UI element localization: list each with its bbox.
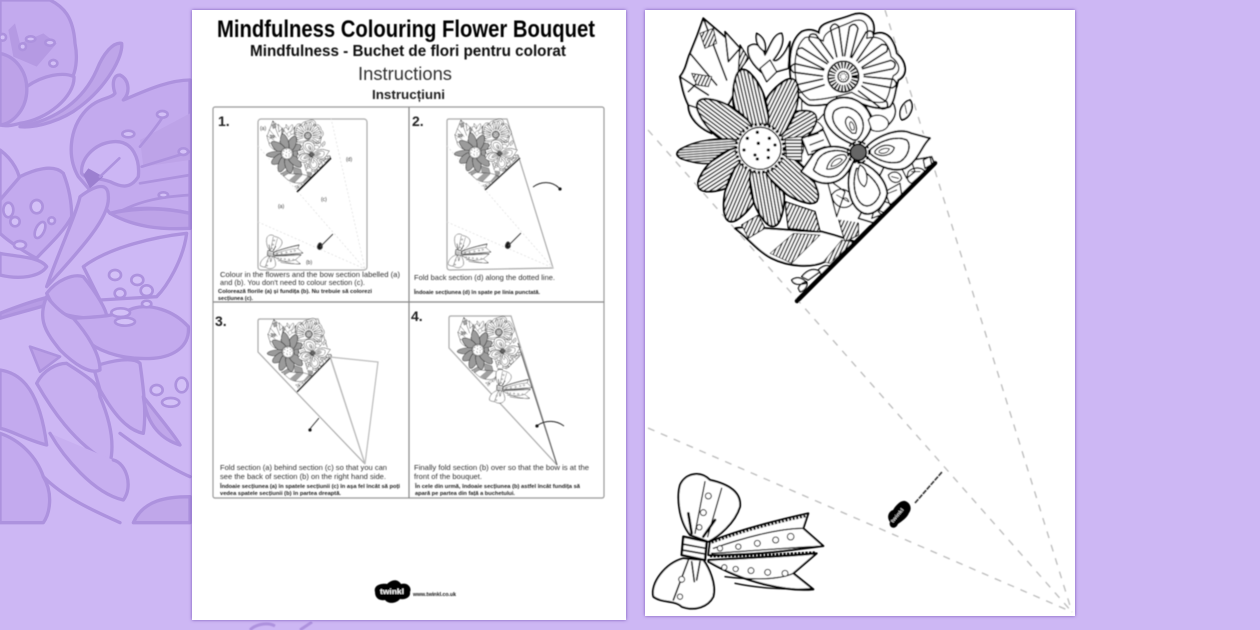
tab line (915, 472, 942, 503)
step 4 (411, 308, 589, 497)
instruction grid frame (213, 107, 604, 498)
step number 2: 2. (412, 113, 424, 129)
title: Mindfulness Colouring Flower Bouquet (217, 16, 595, 43)
step 1 caption: Colorează florile (a) și fundița (b). Nu trebuie să colorezi (218, 289, 372, 295)
step 4 bow (489, 370, 532, 403)
step 4 caption (414, 463, 589, 497)
step 1 caption (218, 270, 401, 302)
step 1 caption: secțiunea (c). (218, 296, 253, 302)
flower bouquet (676, 14, 937, 292)
step 1 bow (260, 235, 303, 269)
tab logo wordmark: twinkl (890, 507, 906, 524)
arrow: fold back (533, 183, 561, 190)
step 3 caption (219, 463, 400, 497)
step 2 caption: Îndoaie secțiunea (d) în spate pe linia punctată. (413, 288, 540, 296)
step 1 section labels: (c) (321, 197, 327, 203)
step 3 caption: see the back of section (b) on the right hand side. (220, 472, 386, 481)
step 3 folded outline (258, 319, 365, 464)
arrow: fold behind (309, 418, 319, 431)
step 2 caption (413, 273, 555, 296)
step 2 bouquet (454, 119, 519, 188)
panel: colouring template sheet (645, 10, 1075, 616)
step 1 section labels: (a) (278, 204, 284, 210)
logo wordmark: twinkl (380, 589, 404, 596)
step 1 caption: Colour in the flowers and the bow section labelled (a) (220, 270, 401, 279)
step 3 bouquet (267, 318, 332, 388)
sheet background (192, 10, 626, 620)
step 3 back section outline (330, 357, 378, 464)
step number 3: 3. (215, 313, 227, 329)
step 1 caption: and (b). You don't need to colour section (c). (220, 278, 365, 287)
step 2 dotted fold lines (447, 146, 553, 268)
subtitle in Romanian: Mindfulness - Buchet de flori pentru colorat (250, 43, 567, 60)
step 1 (218, 113, 401, 302)
step 4 caption: apară pe partea din față a buchetului. (415, 491, 515, 497)
heading: instructions in Romanian: Instrucțiuni (372, 87, 445, 102)
step 3 (215, 313, 400, 497)
step 2 folded outline (447, 119, 553, 270)
step 4 caption: front of the bouquet. (414, 472, 482, 481)
step number 4: 4. (411, 308, 423, 324)
step 1 dotted fold lines (258, 118, 365, 269)
step 2 (412, 113, 561, 296)
step 2 caption: Fold back section (d) along the dotted line. (414, 273, 555, 282)
footer logo (375, 580, 457, 603)
heading: instructions: Instructions (358, 64, 452, 84)
thick bouquet base line (797, 163, 935, 301)
tab logo blob (888, 501, 911, 528)
step 4 bouquet (457, 316, 522, 386)
step 3 caption: Fold section (a) behind section (c) so that you can (220, 463, 387, 472)
step 4 fold edge (518, 343, 557, 465)
step 1 section labels: (b) (306, 260, 312, 266)
twinkl tab mark (888, 472, 942, 528)
step 2 bow line (485, 158, 520, 190)
step 2 bow (448, 234, 491, 268)
template sheet background (645, 10, 1075, 616)
background flower fragment below first sheet (250, 622, 312, 630)
panel: instruction sheet (192, 10, 626, 620)
logo blob (375, 580, 411, 603)
dotted fold lines (648, 10, 1072, 612)
step number 1: 1. (218, 113, 230, 129)
step 1 section labels: (d) (346, 157, 352, 163)
step 4 caption: În cele din urmă, îndoaie secțiunea (b) astfel încât fundița să (414, 482, 581, 490)
step 2 small logo mark (505, 233, 521, 248)
step 3 caption: vedea spatele secțiunii (b) în partea dreaptă. (220, 491, 341, 497)
step 1 section labels (260, 126, 352, 266)
ribbon bow (653, 474, 823, 609)
step 1 section labels: (a) (260, 126, 266, 132)
step 3 caption: Îndoaie secțiunea (a) în spatele secțiunii (c) în așa fel încât să poți (219, 482, 400, 490)
step 1 sheet outline (258, 119, 367, 270)
arrow: fold over (536, 421, 564, 427)
step 4 folded outline (449, 316, 557, 465)
step 1 small logo mark (317, 234, 333, 249)
step 3 bow line (297, 358, 330, 392)
step 1 bow line (297, 158, 331, 192)
step 4 caption: Finally fold section (b) over so that the bow is at the (414, 463, 589, 472)
background flower line art (0, 0, 190, 523)
step 1 bouquet (266, 120, 331, 189)
website address: www.twinkl.co.uk (412, 592, 457, 598)
